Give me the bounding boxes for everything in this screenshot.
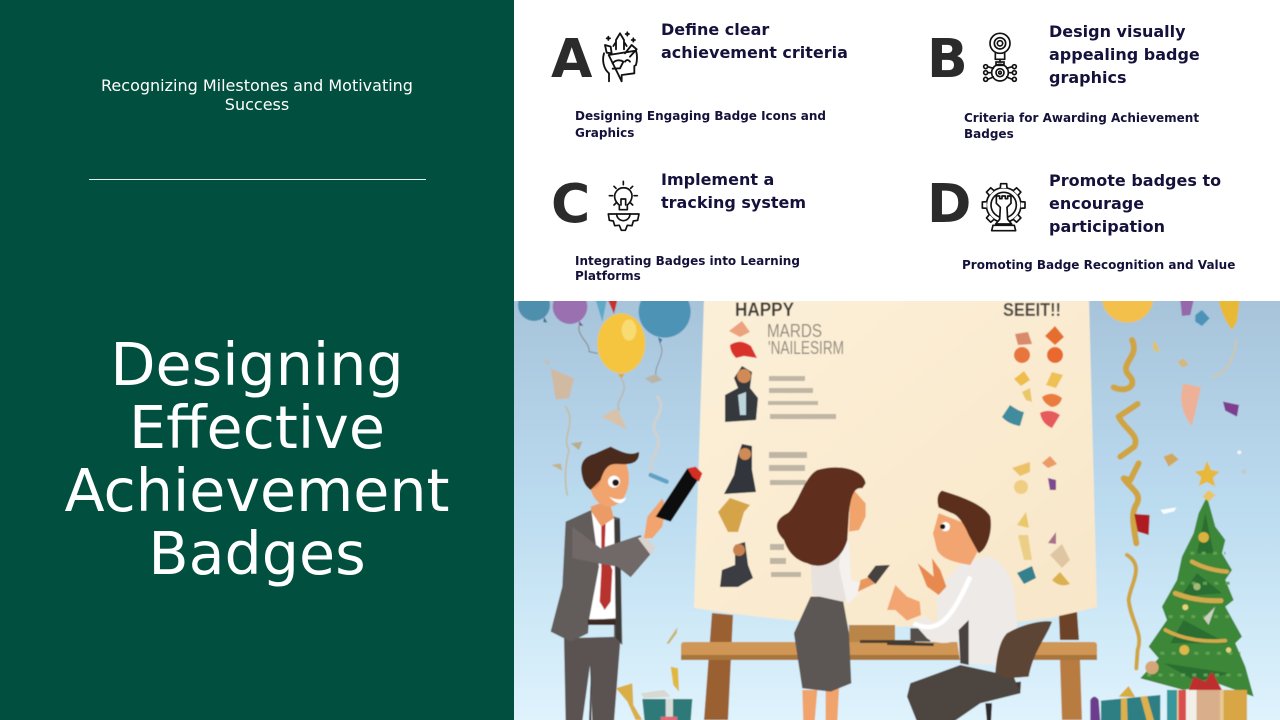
description A (575, 109, 826, 140)
balloons (518, 286, 691, 495)
main title: Effective (129, 394, 385, 462)
heading C: Implement a (661, 170, 774, 189)
balloons and streamers (518, 271, 1246, 668)
panel: left green title panel (0, 0, 514, 720)
main title: Achievement (64, 457, 450, 525)
description C: Platforms (575, 269, 641, 283)
description D: Promoting Badge Recognition and Value (962, 258, 1235, 272)
panel: item D (927, 171, 1235, 272)
gifts (616, 627, 1247, 720)
panel: item C (551, 170, 806, 283)
sky background (510, 296, 1280, 720)
heading B: graphics (1049, 68, 1126, 87)
heading D: participation (1049, 217, 1165, 236)
description B: Criteria for Awarding Achievement (964, 111, 1199, 125)
letter A: A (551, 27, 592, 90)
subtitle (101, 76, 413, 114)
heading C: tracking system (661, 193, 806, 212)
poster name text: MARDS (767, 321, 822, 341)
icon: light bulb over gear (608, 180, 640, 232)
easel legs (704, 612, 1082, 720)
poster text and icons (718, 300, 1070, 587)
heading A: Define clear (661, 20, 769, 39)
letter B: B (927, 27, 968, 90)
main title: Badges (148, 520, 366, 588)
heading D: Promote badges to (1049, 171, 1221, 190)
heading A (661, 20, 848, 62)
icon: light bulb with gear and circuit (982, 32, 1018, 82)
panel: item A (551, 20, 848, 140)
main title (64, 331, 450, 588)
heading A: achievement criteria (661, 43, 848, 62)
Christmas tree (1140, 461, 1254, 697)
description A: Graphics (575, 126, 634, 140)
heading B: Design visually (1049, 22, 1186, 41)
description C (575, 254, 800, 283)
icon: gear with chess rook (982, 182, 1026, 232)
description C: Integrating Badges into Learning (575, 254, 800, 268)
poster caption: 'NAILESIRM (768, 338, 844, 358)
poster board (694, 298, 1097, 627)
description A: Designing Engaging Badge Icons and (575, 109, 826, 123)
heading D (1049, 171, 1221, 236)
illustration: office celebration scene (514, 301, 1280, 720)
heading C (661, 170, 806, 212)
subtitle: Recognizing Milestones and Motivating (101, 76, 413, 95)
icon: head with creative tools (602, 31, 638, 82)
heading B: appealing badge (1049, 45, 1200, 64)
left man with phone (551, 447, 702, 720)
heading B (1049, 22, 1200, 87)
poster people and lines (718, 321, 1070, 587)
description B: Badges (964, 127, 1014, 141)
letter C: C (551, 172, 590, 235)
heading D: encourage (1049, 194, 1144, 213)
description B (964, 111, 1199, 141)
right streamers and confetti (1102, 271, 1246, 668)
seated man and chair (887, 491, 1052, 720)
star (1195, 461, 1220, 487)
woman with tablet (777, 467, 890, 720)
panel: item B (927, 22, 1200, 141)
letter D: D (927, 172, 971, 235)
divider line (89, 179, 426, 180)
table (681, 625, 1097, 660)
subtitle: Success (225, 95, 289, 114)
main title: Designing (110, 331, 404, 399)
